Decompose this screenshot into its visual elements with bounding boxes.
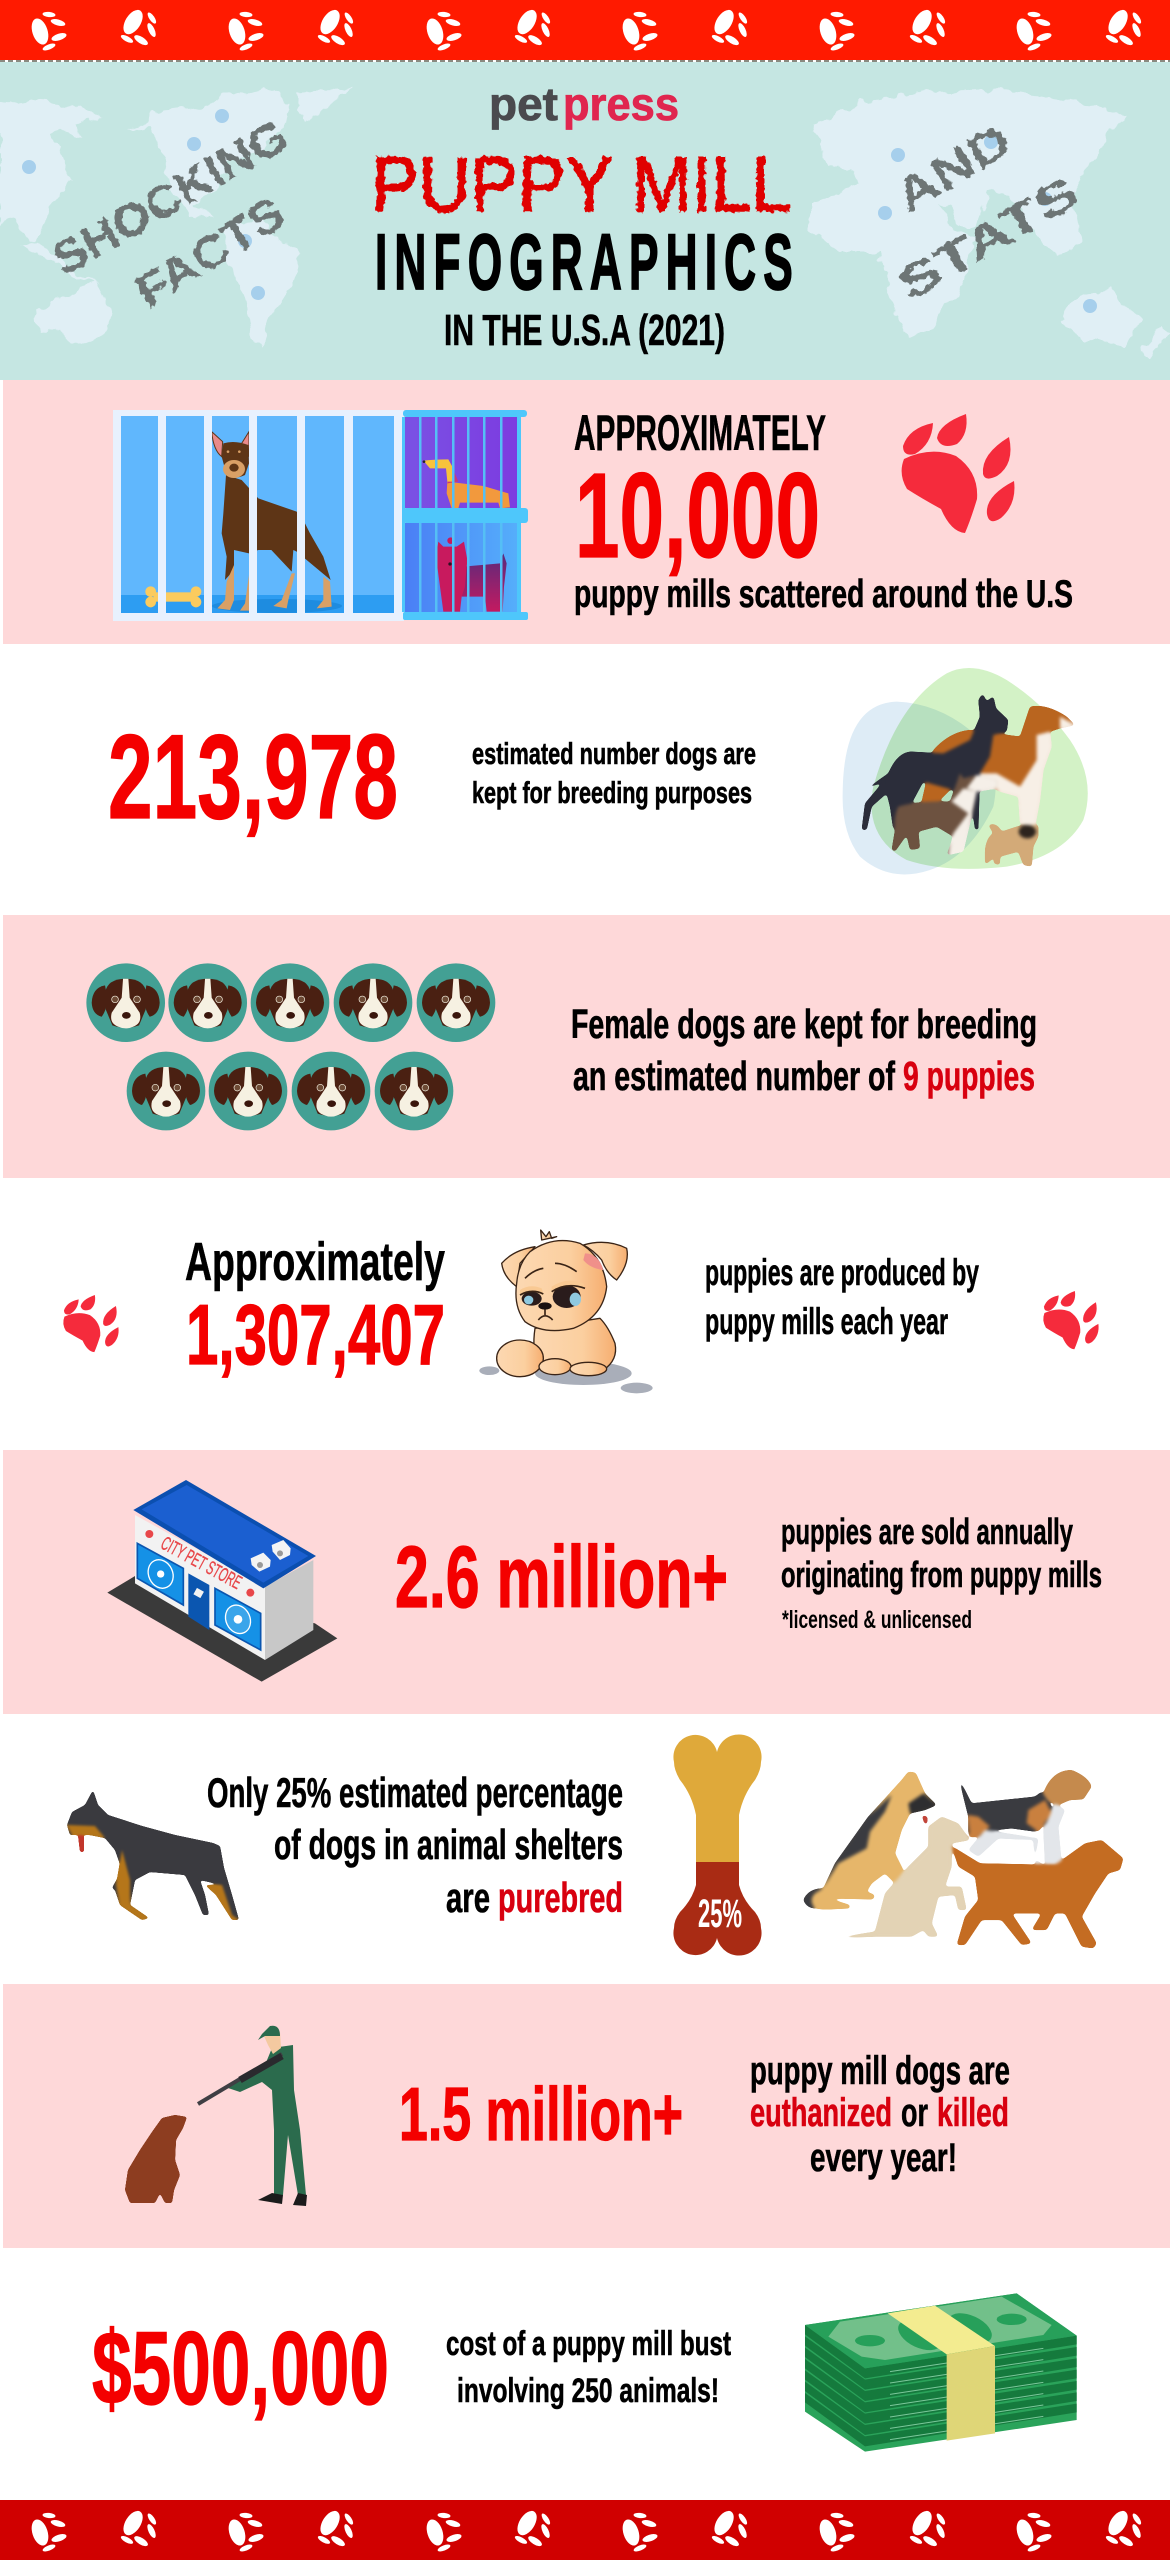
number: 10,000: 10,000 [575,447,820,583]
logo: petpress: press [563,78,679,130]
text: puppies are sold [781,1511,1102,1595]
panel: 2.6 million sold [3,1450,1170,1714]
handwritten: and stats: STATS [888,165,1088,311]
text: approximately: APPROXIMATELY [574,405,826,461]
icon: right paw [1043,1291,1099,1349]
text: female dogs: 9 puppies [903,1053,1035,1099]
panel: header [0,62,1170,380]
illustration: sad puppy [479,1230,653,1393]
panel: 10,000 puppy mills [3,380,1170,644]
text: only 25 percent: are [446,1874,490,1921]
footnote: licensed: *licensed & unlicensed [782,1606,972,1634]
text: estimated number: kept for breeding purposes [472,775,752,810]
yorkie [436,537,507,612]
panel: 25 percent purebred [67,1734,1123,1956]
text: estimated number [472,736,756,810]
panel: 500,000 cost [92,2293,1077,2452]
illustration: group of dogs [843,668,1088,874]
number: 213,978: 213,978 [108,710,398,844]
text: puppy mill dogs [750,2049,1010,2180]
chart: bone 25 percent: 25% [698,1892,742,1936]
text: cost of a bust: cost of a puppy mill bust [446,2325,731,2363]
number: 1,307,407: 1,307,407 [186,1288,445,1383]
text: puppy mill dogs: puppy mill dogs are [750,2049,1010,2093]
illustration: caged dogs [113,410,528,621]
logo: petpress: pet [489,78,558,130]
number: 500,000: $500,000 [92,2311,389,2427]
text: female dogs [571,1001,1037,1099]
left world map [0,88,352,347]
handwritten: shocking facts: SHOCKING [44,109,296,285]
dachshund [423,459,510,508]
text: only 25 percent: Only 25% estimated percentage [207,1769,623,1816]
bottom paw band [0,2500,1170,2560]
logo: petpress [489,78,679,130]
text: estimated number: estimated number dogs are [472,736,756,771]
text: puppy mill dogs: or [901,2091,928,2135]
left map dots [22,109,265,300]
text: cost of a bust: involving 250 animals! [457,2372,719,2410]
text: puppy mill dogs: killed [937,2091,1009,2135]
number: 1.5 million: 1.5 million+ [399,2072,683,2156]
handwritten: shocking facts: FACTS [126,186,294,318]
illustration: city pet store [107,1480,337,1682]
text: only 25 percent: purebred [498,1874,623,1921]
number: 2.6 million: 2.6 million+ [395,1529,728,1626]
illustration: city pet store: CITY PET STORE [157,1533,245,1594]
small stacked cages [402,410,528,620]
right map dots [878,135,1097,313]
text: puppy mill dogs: euthanized [750,2091,892,2135]
text: cost of a bust [446,2325,731,2410]
illustration: four dogs [803,1770,1123,1948]
panel: 1.5 million euthanized [3,1984,1170,2248]
handwritten: and stats: AND [886,114,1020,222]
text: only 25 percent: of dogs in animal shelters [274,1821,623,1868]
illustration: brown dog [125,2115,187,2203]
text: only 25 percent [207,1769,623,1921]
illustration: man with gun [198,2026,307,2206]
panel: 9 puppies [3,915,1170,1178]
doberman in cage [145,432,332,611]
text: female dogs: an estimated number of [573,1053,895,1099]
text: puppies are produced: puppy mills each year [705,1301,948,1342]
bone toy [145,586,201,607]
text: puppies are produced [705,1252,979,1342]
icon: left paw [63,1295,119,1352]
handwritten: and stats [886,114,1088,311]
icon: big paw [902,414,1014,533]
title: puppy mill: PUPPY MILL [371,140,791,228]
right world map [812,90,1170,358]
illustration: money stack [805,2293,1077,2452]
text: puppy mill dogs: every year! [810,2136,957,2180]
text: puppies are produced: puppies are produced by [705,1252,979,1293]
panel: 213,978 breeding dogs [108,668,1088,874]
icons: nine puppy faces [86,963,495,1130]
panel: 1,307,407 puppies [63,1230,1099,1393]
illustration: black doberman [67,1790,239,1920]
top paw band [0,0,1170,61]
subtitle: in the usa: IN THE U.S.A (2021) [444,306,725,355]
chart: bone 25 percent [673,1734,762,1956]
text: approximately: Approximately [185,1232,445,1292]
title: infographics: INFOGRAPHICS [375,217,793,306]
